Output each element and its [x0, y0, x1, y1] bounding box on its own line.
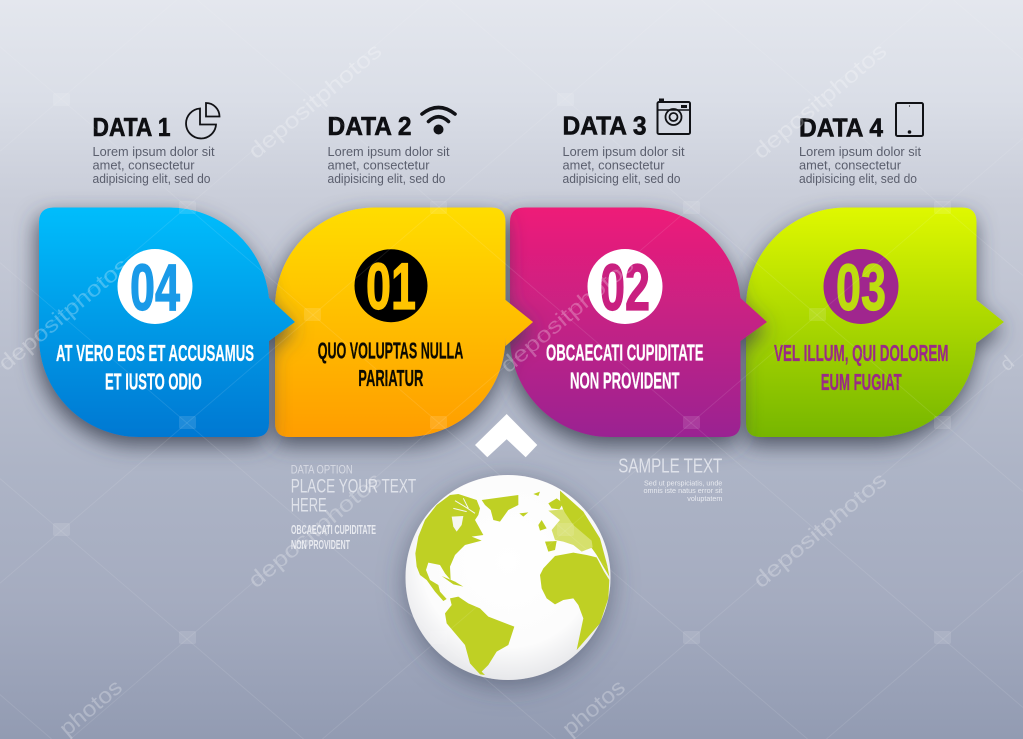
text: step 01 caption: [318, 337, 463, 391]
text: step 02 caption: NON PROVIDENT: [570, 368, 680, 394]
text: data 2 description: amet, consectetur: [328, 158, 430, 172]
watermark pattern: photos: [557, 674, 630, 739]
continent: north america: [415, 494, 483, 601]
text: data 4 description: Lorem ipsum dolor sit: [799, 145, 922, 159]
watermark pattern: d: [996, 352, 1019, 376]
panel: step 02 pink: [510, 207, 767, 437]
continent: south america: [445, 597, 514, 675]
text: step 02 caption: [546, 340, 704, 394]
shape: orange leaf with arrow: [275, 208, 533, 437]
text block: data option: NON PROVIDENT: [291, 537, 350, 552]
text: data 3 description: Lorem ipsum dolor sit: [562, 145, 685, 159]
panel: data 1 header: [92, 103, 220, 186]
text: step 03 caption: EUM FUGIAT: [821, 369, 902, 395]
continent: africa: [540, 553, 609, 650]
globe: [406, 475, 610, 680]
text: data 4 description: amet, consectetur: [799, 158, 901, 172]
continent: greenland: [482, 495, 518, 522]
text: data 1 description: amet, consectetur: [92, 158, 194, 172]
panel: step 01 orange: [275, 208, 533, 437]
globe: southern continents: [442, 576, 514, 675]
arrow: white chevron up: [475, 414, 537, 457]
text: step 01 caption: PARIATUR: [358, 365, 424, 391]
icon: tablet: [896, 103, 923, 136]
shape: blue leaf with arrow: [39, 207, 295, 437]
badge: 04: 04: [130, 250, 180, 324]
continent: iberia: [545, 541, 557, 552]
text: data 1 description: [92, 145, 215, 186]
text: step 04 caption: ET IUSTO ODIO: [105, 368, 202, 394]
continent: scandinavia: [548, 498, 563, 509]
text block: sample text: Sed ut perspiciatis, unde: [644, 480, 722, 487]
continent: arctic channels: [453, 498, 475, 513]
panel: data 4 header: [799, 103, 923, 186]
text block: data option: [291, 462, 416, 552]
watermark pattern: depositphotos: [748, 38, 891, 164]
watermark pattern: depositphotos: [243, 38, 386, 164]
globe: northern continents: [415, 491, 609, 650]
globe: white sphere: [406, 475, 610, 680]
text block: data option: DATA OPTION: [291, 462, 353, 476]
watermark pattern: photos: [54, 674, 127, 739]
text block: data option: PLACE YOUR TEXT: [291, 476, 416, 497]
badge: 02: 02: [600, 250, 650, 324]
text block: data option: HERE: [291, 495, 327, 516]
text: data 3 description: adipisicing elit, sed do: [562, 172, 681, 186]
text block: data option: OBCAECATI CUPIDITATE: [291, 522, 376, 537]
heading: data 3: DATA 3: [562, 110, 646, 140]
panel: step 03 green: [746, 208, 1004, 437]
watermark pattern: depositphotos: [243, 467, 386, 593]
continent: svalbard: [533, 492, 540, 496]
text: data 4 description: [799, 145, 922, 186]
watermark pattern: depositphotos: [748, 467, 891, 593]
icon: camera: [658, 98, 690, 134]
badge: 03: 03: [836, 250, 886, 324]
text: step 04 caption: [56, 340, 254, 394]
icon: pie chart: [186, 103, 220, 138]
text: data 4 description: adipisicing elit, sed do: [799, 172, 917, 186]
text: step 01 caption: QUO VOLUPTAS NULLA: [318, 337, 463, 363]
continent: europe: [548, 509, 593, 552]
watermark pattern: depositphotos: [495, 252, 638, 378]
text: step 04 caption: AT VERO EOS ET ACCUSAMUS: [56, 340, 254, 366]
shape: green leaf with arrow: [746, 208, 1004, 437]
heading: data 1: DATA 1: [92, 112, 170, 142]
text: data 2 description: [328, 145, 450, 186]
shape: pink leaf with arrow: [510, 207, 767, 437]
text: step 03 caption: [774, 340, 948, 395]
panel: step 04 blue: [39, 207, 295, 437]
text: data 3 description: amet, consectetur: [562, 158, 664, 172]
panel: data 3 header: [562, 98, 690, 186]
text block: sample text: SAMPLE TEXT: [618, 456, 722, 478]
icon: wifi: [422, 108, 455, 134]
panel: data 2 header: [328, 108, 455, 186]
continent: caribbean: [442, 576, 463, 587]
text block: sample text: [618, 456, 722, 503]
text block: sample text: voluptatem: [687, 496, 722, 503]
heading: data 4: DATA 4: [799, 112, 884, 142]
text: data 3 description: [562, 145, 685, 186]
heading: data 2: DATA 2: [328, 111, 412, 141]
continent: hudson bay: [452, 516, 463, 532]
badge: 01: 01: [366, 249, 416, 323]
continent: iceland: [519, 512, 528, 517]
continent: britain: [538, 520, 547, 531]
text block: sample text: omnis iste natus error sit: [644, 488, 722, 495]
text: data 1 description: adipisicing elit, sed do: [92, 172, 211, 186]
text: data 2 description: Lorem ipsum dolor sit: [328, 145, 450, 159]
continent: eurasia: [560, 491, 609, 577]
text: step 02 caption: OBCAECATI CUPIDITATE: [546, 340, 704, 366]
text: data 1 description: Lorem ipsum dolor sit: [92, 145, 215, 159]
text: data 2 description: adipisicing elit, sed do: [328, 172, 446, 186]
